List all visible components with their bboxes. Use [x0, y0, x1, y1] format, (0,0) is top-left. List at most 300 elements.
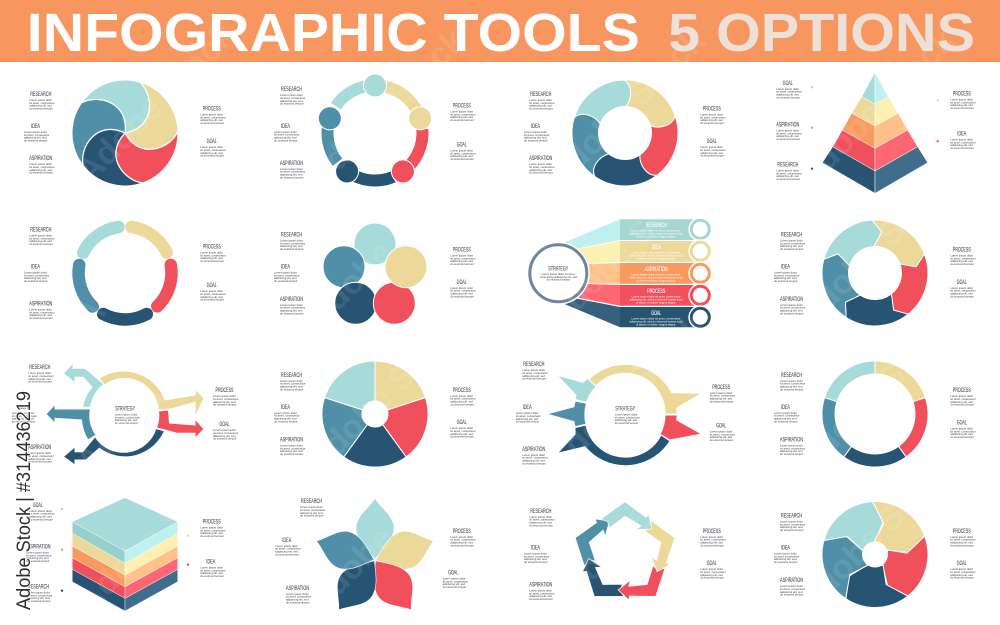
text: process: do eiusmod tempor: [200, 534, 224, 538]
text: research: do eiusmod tempor: [780, 247, 804, 251]
text: idea: sit amet, consectetur: [24, 133, 49, 137]
text: goal: sit amet, consectetur: [450, 429, 476, 433]
text: goal: do eiusmod tempor: [213, 437, 237, 441]
segment: research: [824, 502, 883, 550]
segment: idea: [68, 265, 104, 306]
text: goal: do eiusmod tempor: [200, 298, 224, 302]
text: goal: adipiscing elit, sed: [213, 434, 236, 438]
text: idea: do eiusmod tempor: [274, 138, 298, 142]
text: idea: adipiscing elit, sed: [274, 276, 297, 280]
text: process: adipiscing elit, sed: [200, 118, 223, 122]
text: aspiration: [280, 438, 305, 456]
text: goal: do eiusmod tempor: [29, 517, 53, 521]
text: goal: adipiscing elit, sed: [450, 291, 473, 295]
text: research: Lorem ipsum dolor: [522, 368, 545, 372]
text: aspiration: [29, 156, 55, 175]
text: process: do eiusmod tempor: [450, 543, 474, 547]
panel: ring with nodes: [274, 74, 476, 205]
text: idea: IDEA: [282, 538, 291, 544]
band: process: [578, 283, 712, 307]
text: research: Lorem ipsum dolor: [27, 590, 50, 594]
strategy circle: STRATEGY: [548, 266, 568, 272]
arrow: idea: [46, 404, 96, 440]
segment: aspiration: [331, 146, 393, 205]
text: idea: adipiscing elit, sed: [524, 136, 547, 140]
text: research: adipiscing elit, sed: [27, 596, 50, 600]
text: idea: Lorem ipsum dolor: [24, 130, 47, 134]
text: goal: do eiusmod tempor: [450, 435, 474, 439]
text: aspiration: sit amet, consectetur: [780, 306, 805, 310]
text: goal: GOAL: [783, 81, 793, 87]
text: goal: [700, 139, 726, 158]
segment: process: [588, 364, 702, 414]
text: goal: do eiusmod tempor: [200, 154, 224, 158]
text: aspiration: adipiscing elit, sed: [529, 168, 552, 172]
chart: overlapping circles: [323, 223, 427, 324]
panel: pyramid: [776, 72, 976, 193]
layer: top: [862, 72, 888, 104]
text: idea: adipiscing elit, sed: [516, 417, 539, 421]
text: goal: [710, 424, 735, 442]
text: idea: adipiscing elit, sed: [24, 276, 47, 280]
layer: red: [833, 130, 918, 171]
text: aspiration: Lorem ipsum dolor: [286, 592, 309, 596]
text: process: Lorem ipsum dolor: [450, 535, 473, 539]
text: aspiration: do eiusmod tempor: [522, 461, 546, 465]
text: research: sit amet, consectetur: [522, 371, 548, 375]
text: goal: sit amet, consectetur: [200, 148, 226, 152]
segment: process: [863, 490, 928, 561]
panel: petals: [275, 498, 476, 621]
text: process: sit amet, consectetur: [200, 253, 226, 257]
text: research: do eiusmod tempor: [29, 106, 53, 110]
text: aspiration: [780, 438, 805, 456]
segment: goal: [875, 398, 928, 457]
text: research: RESEARCH: [530, 509, 551, 515]
layer: yellow: [72, 533, 178, 575]
band: research: ut labore et dolore magna aliqua.: [636, 234, 676, 238]
text: process: adipiscing elit, sed: [200, 531, 223, 535]
chart: rounded arcs ring: [68, 219, 186, 335]
chart: ring with outgoing arrows: [46, 363, 204, 465]
text: process: [700, 529, 726, 547]
text: aspiration: do eiusmod tempor: [780, 593, 804, 597]
text: process: do eiusmod tempor: [700, 121, 724, 125]
text: process: sit amet, consectetur: [950, 256, 976, 260]
text: goal: do eiusmod tempor: [776, 95, 800, 99]
text: idea: Lorem ipsum dolor: [774, 411, 797, 415]
segment: process: [375, 361, 425, 414]
chart: pie: [322, 361, 428, 467]
panel: swirl circle: [24, 75, 226, 202]
text: process: Lorem ipsum dolor: [450, 394, 473, 398]
text: goal: GOAL: [707, 561, 717, 567]
text: process: sit amet, consectetur: [950, 100, 976, 104]
text: research: [280, 87, 305, 106]
text: research: sit amet, consectetur: [300, 508, 325, 512]
text: process: sit amet, consectetur: [200, 115, 226, 119]
text: research: [780, 232, 805, 251]
text: idea: sit amet, consectetur: [524, 554, 549, 558]
text: aspiration: sit amet, consectetur: [776, 131, 802, 135]
text: research: adipiscing elit, sed: [780, 384, 803, 388]
text: goal: Lorem ipsum dolor: [200, 145, 223, 149]
text: goal: sit amet, consectetur: [700, 570, 726, 574]
text: idea: Lorem ipsum dolor: [516, 411, 539, 415]
text: research: [280, 373, 305, 391]
layer: navy: [72, 569, 178, 611]
text: research: adipiscing elit, sed: [529, 521, 552, 525]
subtitle: 5 OPTIONS: [668, 3, 975, 63]
text: aspiration: do eiusmod tempor: [529, 171, 553, 175]
text: idea: adipiscing elit, sed: [200, 571, 223, 575]
panel: arrow donut: [774, 208, 976, 346]
text: idea: Lorem ipsum dolor: [274, 411, 297, 415]
chart: kinked pie: [809, 490, 947, 625]
text: process: PROCESS: [703, 529, 721, 535]
text: idea: IDEA: [19, 405, 28, 411]
text: aspiration: Lorem ipsum dolor: [776, 128, 799, 132]
text: aspiration: sit amet, consectetur: [280, 170, 305, 174]
text: strategy: adipiscing elit, sed: [115, 418, 138, 422]
text: process: sit amet, consectetur: [710, 394, 735, 398]
text: idea: IDEA: [523, 405, 532, 411]
text: process: PROCESS: [953, 529, 971, 535]
text: aspiration: ASPIRATION: [529, 582, 552, 588]
text: aspiration: ASPIRATION: [529, 156, 552, 162]
text: research: Lorem ipsum dolor: [529, 98, 552, 102]
segment: goal: [660, 415, 702, 440]
band: aspiration: ASPIRATION: [645, 267, 668, 273]
text: goal: sit amet, consectetur: [950, 429, 976, 433]
text: aspiration: adipiscing elit, sed: [776, 134, 799, 138]
segment: aspiration: [323, 550, 390, 621]
text: goal: [700, 561, 726, 580]
text: research: do eiusmod tempor: [780, 387, 804, 391]
band: idea: IDEA: [652, 245, 661, 251]
chart: notched donut: [809, 208, 947, 346]
markers: [61, 508, 189, 592]
text: research: [300, 499, 325, 518]
text: aspiration: ASPIRATION: [522, 447, 545, 453]
text: goal: GOAL: [457, 142, 467, 148]
text: idea: sit amet, consectetur: [524, 133, 549, 137]
text: goal: [29, 503, 55, 521]
band: idea: [578, 239, 712, 263]
segment: process: [866, 208, 927, 277]
text: aspiration: adipiscing elit, sed: [286, 598, 309, 602]
text: aspiration: ASPIRATION: [780, 578, 803, 584]
segment: aspiration: [557, 425, 670, 466]
text: aspiration: do eiusmod tempor: [28, 460, 52, 464]
text: process: [700, 106, 726, 125]
text: process: Lorem ipsum dolor: [450, 254, 473, 258]
band: aspiration: [587, 261, 712, 285]
arrow: goal: [618, 560, 675, 612]
header banner: [0, 0, 1000, 63]
text: research: RESEARCH: [30, 92, 51, 98]
text: strategy: [615, 406, 640, 425]
layer: navy: [822, 147, 928, 193]
segment: aspiration: [335, 282, 377, 324]
text: aspiration: ASPIRATION: [28, 544, 50, 550]
text: process: sit amet, consectetur: [450, 256, 476, 260]
diagonal stock watermark: Adobe Stock: [539, 162, 713, 336]
text: idea: Lorem ipsum dolor: [524, 552, 547, 556]
text: idea: sit amet, consectetur: [274, 414, 299, 418]
text: research: RESEARCH: [781, 514, 802, 520]
text: idea: adipiscing elit, sed: [774, 557, 797, 561]
segment: research: [574, 80, 631, 124]
text: research: Lorem ipsum dolor: [29, 234, 52, 238]
text: aspiration: [529, 582, 555, 601]
text: process: [450, 388, 476, 406]
text: process: PROCESS: [703, 106, 721, 112]
segment: idea: [322, 398, 375, 457]
text: goal: sit amet, consectetur: [950, 289, 976, 293]
text: idea: IDEA: [31, 124, 40, 130]
text: process: Lorem ipsum dolor: [213, 394, 236, 398]
text: process: PROCESS: [453, 529, 471, 535]
text: process: [213, 388, 238, 407]
text: research: [529, 92, 555, 110]
text: aspiration: adipiscing elit, sed: [29, 168, 52, 172]
text: aspiration: ASPIRATION: [780, 297, 803, 303]
segment: research: [824, 220, 882, 266]
text: idea: sit amet, consectetur: [774, 554, 799, 558]
text: research: Lorem ipsum dolor: [280, 93, 303, 97]
text: aspiration: adipiscing elit, sed: [780, 308, 803, 312]
band: goal: ut labore et dolore magna aliqua.: [636, 322, 676, 326]
text: research: RESEARCH: [523, 362, 544, 368]
text: idea: [12, 405, 37, 423]
text: idea: sit amet, consectetur: [24, 273, 49, 277]
text: aspiration: ASPIRATION: [776, 122, 799, 128]
text: goal: Lorem ipsum dolor: [443, 576, 466, 580]
text: research: sit amet, consectetur: [29, 101, 55, 105]
text: idea: do eiusmod tempor: [524, 138, 548, 142]
text: idea: sit amet, consectetur: [200, 568, 226, 572]
text: goal: sit amet, consectetur: [443, 579, 468, 583]
segment: goal: [373, 282, 415, 324]
text: goal: sit amet, consectetur: [710, 432, 735, 436]
text: process: Lorem ipsum dolor: [450, 110, 473, 114]
text: goal: GOAL: [957, 421, 967, 427]
arrow: process: [99, 371, 204, 417]
chart: five petals: [310, 498, 440, 621]
chart: donut: [822, 361, 928, 467]
strategy circle: consectetur adipiscing elit, sed: [540, 275, 577, 279]
text: process: sit amet, consectetur: [450, 538, 476, 542]
text: process: PROCESS: [203, 244, 221, 250]
text: research: RESEARCH: [301, 499, 322, 505]
text: idea: sit amet, consectetur: [12, 414, 37, 418]
text: goal: [950, 561, 976, 580]
chart: cyclic pentagon arrows: [568, 502, 683, 612]
text: goal: adipiscing elit, sed: [700, 151, 723, 155]
diagonal stock watermark: Adobe Stock: [789, 162, 963, 336]
text: aspiration: do eiusmod tempor: [29, 316, 53, 320]
text: research: adipiscing elit, sed: [780, 525, 803, 529]
text: goal: GOAL: [207, 283, 217, 289]
text: research: RESEARCH: [281, 232, 302, 238]
text: idea: IDEA: [206, 560, 215, 566]
band: research: RESEARCH: [646, 223, 667, 229]
text: research: RESEARCH: [281, 87, 302, 93]
text: aspiration: Lorem ipsum dolor: [280, 303, 303, 307]
text: research: [27, 584, 52, 603]
text: process: [950, 248, 976, 266]
segment: goal: [105, 107, 192, 190]
diagonal stock watermark: Adobe Stock: [299, 447, 473, 621]
text: goal: sit amet, consectetur: [776, 90, 802, 94]
text: research: do eiusmod tempor: [280, 387, 304, 391]
text: goal: adipiscing elit, sed: [443, 582, 466, 586]
text: research: Lorem ipsum dolor: [28, 371, 51, 375]
segment: idea: [310, 523, 380, 578]
text: process: sit amet, consectetur: [950, 397, 976, 401]
text: aspiration: adipiscing elit, sed: [28, 457, 51, 461]
text: goal: GOAL: [957, 561, 967, 567]
segment: process: [385, 246, 427, 288]
text: process: sit amet, consectetur: [200, 528, 226, 532]
text: strategy: [115, 406, 140, 425]
text: research: RESEARCH: [281, 373, 302, 379]
text: idea: do eiusmod tempor: [524, 560, 548, 564]
text: aspiration: ASPIRATION: [280, 161, 303, 167]
text: aspiration: Lorem ipsum dolor: [780, 584, 803, 588]
text: process: sit amet, consectetur: [213, 397, 238, 401]
segment: aspiration: [838, 275, 912, 346]
segment: research: [83, 227, 118, 253]
segment: process: [131, 219, 167, 261]
text: process: [200, 244, 226, 263]
segment: goal: [360, 550, 427, 621]
segment: process: [386, 76, 435, 136]
text: aspiration: adipiscing elit, sed: [780, 449, 803, 453]
text: goal: GOAL: [220, 422, 230, 428]
text: research: sit amet, consectetur: [776, 171, 802, 175]
chart: layered cube: [72, 498, 178, 611]
segment: idea: [809, 250, 870, 319]
text: goal: GOAL: [716, 424, 727, 430]
text: aspiration: adipiscing elit, sed: [280, 308, 303, 312]
text: goal: sit amet, consectetur: [200, 292, 226, 296]
text: goal: [450, 142, 476, 161]
band: goal: GOAL: [651, 311, 662, 317]
arrow: idea: [568, 512, 610, 569]
hole: [835, 374, 915, 454]
text: process: PROCESS: [953, 248, 971, 254]
text: idea: sit amet, consectetur: [774, 273, 799, 277]
text: research: adipiscing elit, sed: [28, 377, 51, 381]
text: process: Lorem ipsum dolor: [950, 394, 973, 398]
text: goal: [450, 280, 476, 298]
text: research: Lorem ipsum dolor: [780, 379, 803, 383]
text: aspiration: do eiusmod tempor: [280, 175, 304, 179]
text: process: adipiscing elit, sed: [950, 103, 973, 107]
text: aspiration: sit amet, consectetur: [26, 553, 51, 557]
text: research: RESEARCH: [29, 365, 50, 371]
text: aspiration: ASPIRATION: [29, 156, 52, 162]
text: aspiration: do eiusmod tempor: [780, 452, 804, 456]
text: goal: adipiscing elit, sed: [950, 432, 973, 436]
text: process: Lorem ipsum dolor: [710, 391, 733, 395]
text: idea: [274, 405, 299, 423]
panel: stacked cube: [26, 498, 226, 611]
text: goal: [200, 283, 226, 302]
band: research: adipiscing elit, sed do eiusmod tempor incid: [629, 231, 683, 235]
text: process: PROCESS: [953, 388, 971, 394]
diagonal stock watermark: Adobe Stock: [789, 307, 963, 481]
band: aspiration: Lorem ipsum dolor sit amet, consectetur: [632, 272, 681, 276]
hub: [362, 401, 388, 427]
band: process: adipiscing elit, sed do eiusmod tempor incid: [629, 297, 683, 301]
title: INFOGRAPHIC TOOLS: [27, 3, 640, 63]
segment: goal: [375, 398, 428, 457]
text: process: sit amet, consectetur: [450, 397, 476, 401]
text: process: do eiusmod tempor: [200, 121, 224, 125]
text: goal: Lorem ipsum dolor: [450, 426, 473, 430]
text: idea: Lorem ipsum dolor: [274, 270, 297, 274]
text: goal: do eiusmod tempor: [450, 294, 474, 298]
text: idea: sit amet, consectetur: [950, 140, 976, 144]
text: research: do eiusmod tempor: [522, 377, 546, 381]
text: process: adipiscing elit, sed: [950, 259, 973, 263]
text: goal: sit amet, consectetur: [700, 148, 726, 152]
text: research: Lorem ipsum dolor: [280, 238, 303, 242]
text: idea: [524, 124, 549, 142]
text: process: do eiusmod tempor: [700, 543, 724, 547]
text: process: adipiscing elit, sed: [450, 115, 473, 119]
text: goal: sit amet, consectetur: [450, 289, 476, 293]
text: goal: sit amet, consectetur: [213, 431, 238, 435]
text: research: sit amet, consectetur: [27, 593, 52, 597]
text: process: Lorem ipsum dolor: [950, 254, 973, 258]
text: goal: do eiusmod tempor: [950, 576, 974, 580]
text: research: sit amet, consectetur: [529, 101, 555, 105]
text: idea: do eiusmod tempor: [274, 419, 298, 423]
text: goal: adipiscing elit, sed: [776, 93, 799, 97]
text: research: do eiusmod tempor: [300, 514, 324, 518]
text: research: sit amet, consectetur: [280, 382, 305, 386]
diagonal stock watermark: Adobe Stock: [299, 307, 473, 481]
text: aspiration: adipiscing elit, sed: [280, 172, 303, 176]
text: strategy: Lorem ipsum dolor: [615, 412, 638, 416]
text: idea: IDEA: [531, 546, 540, 552]
band: aspiration: adipiscing elit, sed do eiusmod tempor incid: [629, 275, 683, 279]
vertical stock id watermark: Adobe Stock | #314436219: [13, 391, 35, 610]
band: research: [563, 217, 712, 248]
text: goal: adipiscing elit, sed: [29, 514, 52, 518]
band: idea: Lorem ipsum dolor sit amet, consectetur: [632, 250, 681, 254]
text: idea: adipiscing elit, sed: [24, 136, 47, 140]
text: research: [529, 509, 555, 527]
text: idea: do eiusmod tempor: [950, 146, 974, 150]
arrow: aspiration: [63, 428, 164, 465]
text: process: do eiusmod tempor: [710, 399, 733, 403]
text: goal: Lorem ipsum dolor: [776, 87, 799, 91]
text: idea: [774, 546, 799, 564]
text: process: Lorem ipsum dolor: [700, 535, 723, 539]
text: process: PROCESS: [453, 248, 471, 254]
text: process: adipiscing elit, sed: [450, 399, 473, 403]
text: process: PROCESS: [203, 520, 221, 526]
text: process: adipiscing elit, sed: [450, 259, 473, 263]
text: idea: adipiscing elit, sed: [274, 136, 297, 140]
text: process: Lorem ipsum dolor: [200, 112, 223, 116]
text: goal: adipiscing elit, sed: [700, 573, 723, 577]
